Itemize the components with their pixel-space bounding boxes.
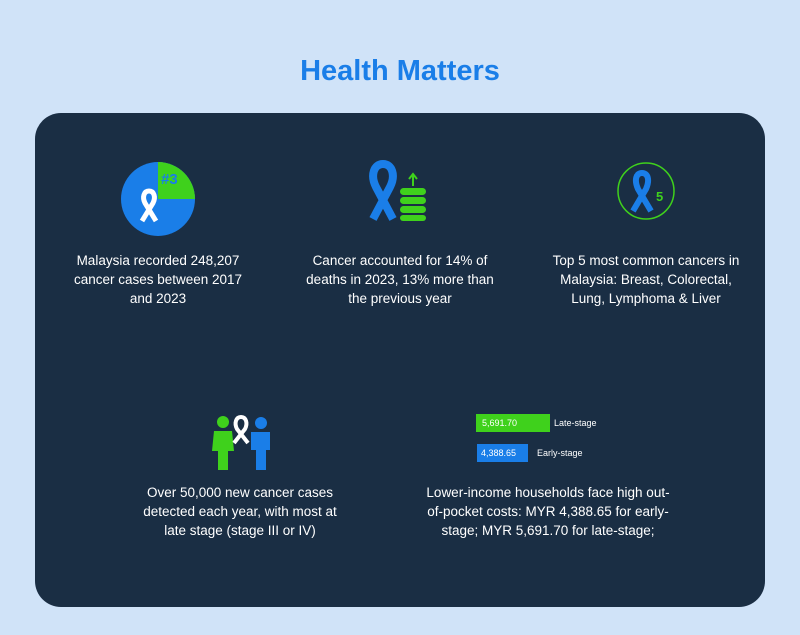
chart: costs bars: Late-stage: [554, 418, 597, 428]
text: top 5: Lung, Lymphoma & Liver: [571, 291, 721, 306]
chart: costs bars: Early-stage: [537, 448, 583, 458]
text: costs: stage; MYR 5,691.70 for late-stage;: [441, 523, 655, 538]
icon: ribbon with coins: [369, 160, 426, 221]
icon: pie chart with ribbon: [121, 162, 195, 236]
text: cases: [74, 253, 242, 306]
icon: ribbon in circle: 5: [656, 189, 663, 204]
text: new cases: [143, 485, 337, 538]
title: Health Matters: [300, 55, 500, 87]
bar: early-stage: [477, 444, 528, 462]
icon: ribbon in circle: [617, 162, 675, 220]
bar: early-stage: 4,388.65: [481, 448, 516, 458]
text: costs: Lower-income households face high out-: [426, 485, 670, 500]
bar: late-stage: 5,691.70: [482, 418, 517, 428]
text: deaths: Cancer accounted for 14% of: [313, 253, 487, 268]
text: deaths: [306, 253, 494, 306]
text: top 5: [552, 253, 739, 306]
text: top 5: Malaysia: Breast, Colorectal,: [560, 272, 732, 287]
chart: costs bars: [476, 414, 597, 462]
text: new cases: Over 50,000 new cancer cases: [147, 485, 333, 500]
text: deaths: the previous year: [348, 291, 452, 306]
text: cases: cancer cases between 2017: [74, 272, 242, 287]
text: costs: of-pocket costs: MYR 4,388.65 for early-: [427, 504, 669, 519]
icon: pie chart with ribbon: #3: [161, 171, 178, 188]
text: costs: [426, 485, 670, 538]
text: top 5: Top 5 most common cancers in: [553, 253, 739, 268]
text: new cases: late stage (stage III or IV): [164, 523, 316, 538]
text: new cases: detected each year, with most at: [143, 504, 337, 519]
icon: people with ribbon: [212, 415, 270, 470]
panel: main: [35, 113, 765, 607]
text: cases: and 2023: [130, 291, 186, 306]
text: deaths: deaths in 2023, 13% more than: [306, 272, 494, 287]
text: cases: Malaysia recorded 248,207: [77, 253, 239, 268]
bar: late-stage: [476, 414, 550, 432]
